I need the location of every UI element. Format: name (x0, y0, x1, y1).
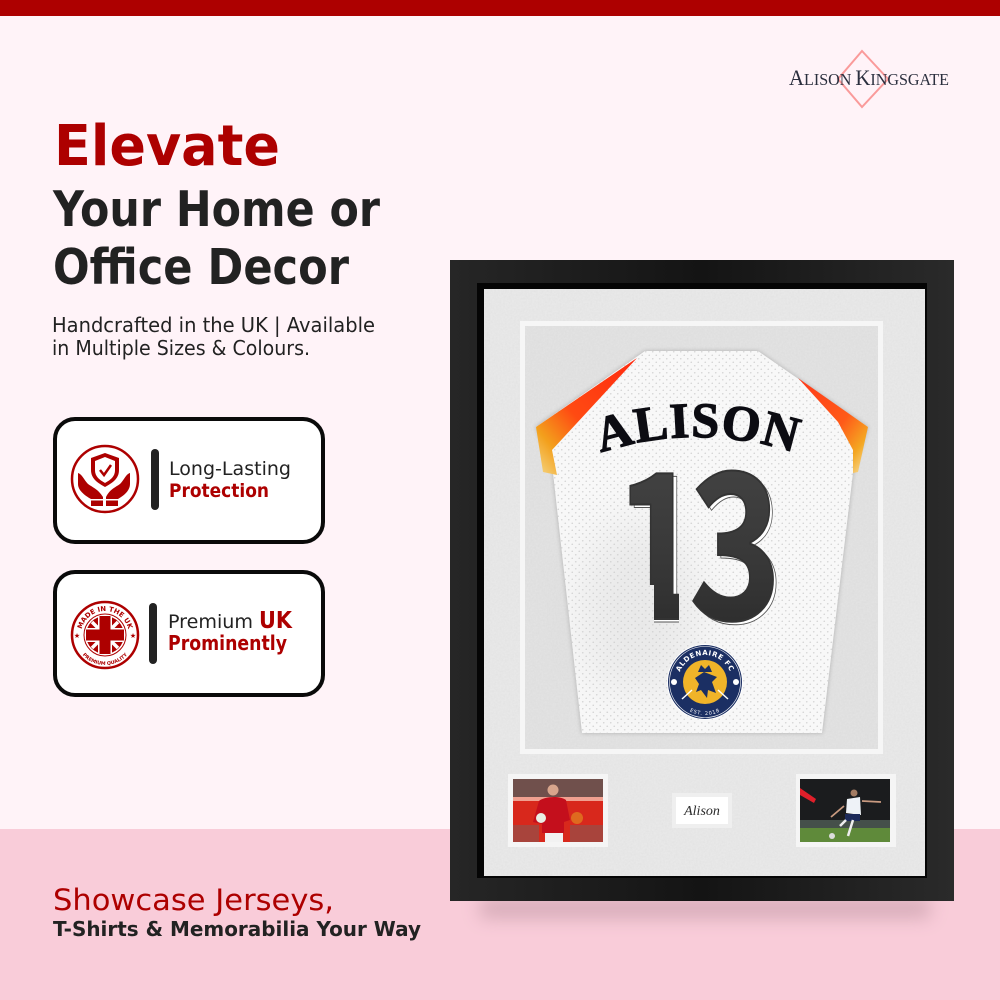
icon: made in the UK badge: PREMIUM QUALITY (82, 652, 126, 666)
panel: premium UK (53, 570, 325, 697)
label (169, 458, 291, 502)
brand logo: ALISON KINGSGATE (789, 65, 949, 90)
subheading text: in Multiple Sizes & Colours. (52, 336, 310, 360)
label: Prominently (168, 631, 287, 655)
bottom caption (53, 883, 421, 941)
number 13: 3 (692, 389, 785, 681)
number 13: 3 (689, 386, 782, 678)
framed jersey (450, 260, 954, 901)
right photo (796, 774, 896, 847)
club badge: EST. 2018 (690, 708, 719, 715)
icon: made in the UK badge: MADE IN THE UK (77, 606, 133, 630)
signature card: Alison (683, 804, 720, 819)
divider (151, 449, 159, 510)
number 13 (629, 470, 776, 626)
heading: Office Decor (53, 239, 350, 296)
mat board (484, 289, 925, 876)
club badge: ALDENAIRE FC (676, 650, 734, 672)
subheading text: Handcrafted in the UK | Available (52, 313, 375, 337)
player name: ALISON (600, 404, 803, 453)
icon: made in the UK badge (70, 600, 140, 670)
label: Long-Lasting (169, 458, 291, 480)
bottom caption: Showcase Jerseys, (53, 883, 334, 917)
bottom pink band (0, 829, 1000, 1000)
panel: long-lasting protection (55, 419, 323, 542)
heading: Elevate (54, 114, 280, 179)
right shoulder trim (798, 378, 868, 473)
number 13: 1 (618, 389, 707, 681)
left shoulder trim (536, 358, 637, 475)
window bevel (520, 321, 883, 754)
signature card (672, 793, 732, 828)
number 13: 1 (614, 386, 703, 678)
black frame (450, 260, 954, 901)
top bar (0, 0, 1000, 16)
left photo (508, 774, 608, 847)
club badge (667, 644, 743, 720)
window inner (525, 326, 878, 749)
label: Premium (168, 611, 253, 633)
icon: made in the UK badge: ★ (130, 632, 136, 640)
icon: shield in hands (72, 446, 138, 512)
label: Protection (169, 480, 269, 502)
bottom caption: T-Shirts & Memorabilia Your Way (53, 917, 421, 941)
label (168, 608, 293, 655)
heading: Your Home or (52, 181, 381, 238)
icon: made in the UK badge: ★ (74, 632, 80, 640)
subheading text (52, 313, 375, 360)
frame shadow (480, 898, 930, 918)
brand logo (789, 51, 949, 107)
heading (52, 114, 381, 296)
jersey (535, 349, 869, 736)
divider (149, 603, 157, 664)
label: UK (259, 608, 293, 634)
